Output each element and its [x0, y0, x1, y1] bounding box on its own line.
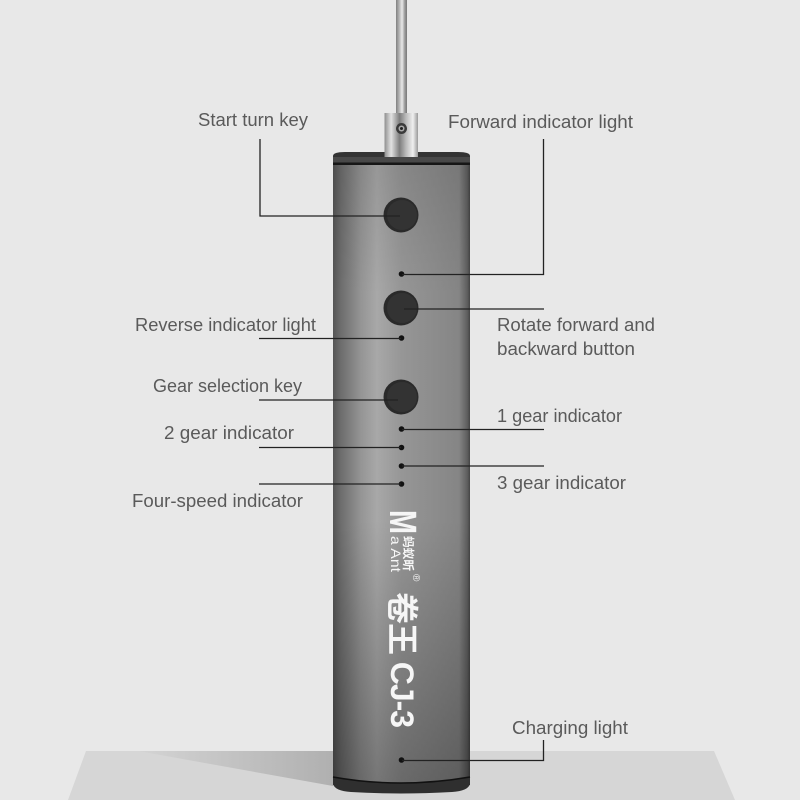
callout: charging light — [402, 718, 628, 760]
callout: start turn key: Start turn key — [198, 110, 308, 130]
callout: 1 gear indicator: 1 gear indicator — [497, 406, 622, 426]
top cap — [333, 152, 470, 165]
callout: forward indicator light — [402, 112, 633, 274]
callout: reverse indicator light: Reverse indicator light — [135, 315, 316, 335]
logo: MaAnt: ® — [410, 574, 421, 582]
button: rotate forward and backward — [384, 290, 418, 326]
table surface — [68, 751, 735, 800]
callout: 3 gear indicator: 3 gear indicator — [497, 473, 626, 493]
lower body shading — [333, 520, 470, 785]
logo: MaAnt: a Ant — [388, 536, 404, 572]
product: screwdriver — [333, 0, 470, 794]
callout: start turn key — [198, 110, 400, 216]
button: start turn key — [384, 198, 418, 232]
cast shadow — [138, 751, 333, 786]
logo: MaAnt: 蚂蚁昕 — [401, 536, 416, 571]
logo: MaAnt — [381, 510, 423, 582]
upper body shading — [333, 165, 470, 295]
shaft — [396, 0, 407, 114]
bottom cap — [333, 777, 470, 794]
callout: 2 gear indicator: 2 gear indicator — [164, 423, 294, 443]
callout: gear selection key: Gear selection key — [153, 376, 302, 396]
callout: four-speed indicator: Four-speed indicator — [132, 491, 303, 511]
button: gear selection — [384, 380, 418, 414]
callout: charging light: Charging light — [512, 718, 628, 738]
indicator dots — [399, 271, 404, 763]
callout: rotate forward and backward button: Rotate forward and — [497, 315, 655, 335]
callout: forward indicator light: Forward indicator light — [448, 112, 633, 132]
callout: rotate forward and backward button: backward button — [497, 339, 635, 359]
metal collar — [384, 113, 418, 157]
cylinder body — [333, 160, 470, 785]
callout: rotate forward and backward button — [404, 309, 655, 359]
product name: CJ-3: 卷王 CJ-3 — [384, 592, 420, 728]
logo: MaAnt: M — [381, 510, 423, 534]
